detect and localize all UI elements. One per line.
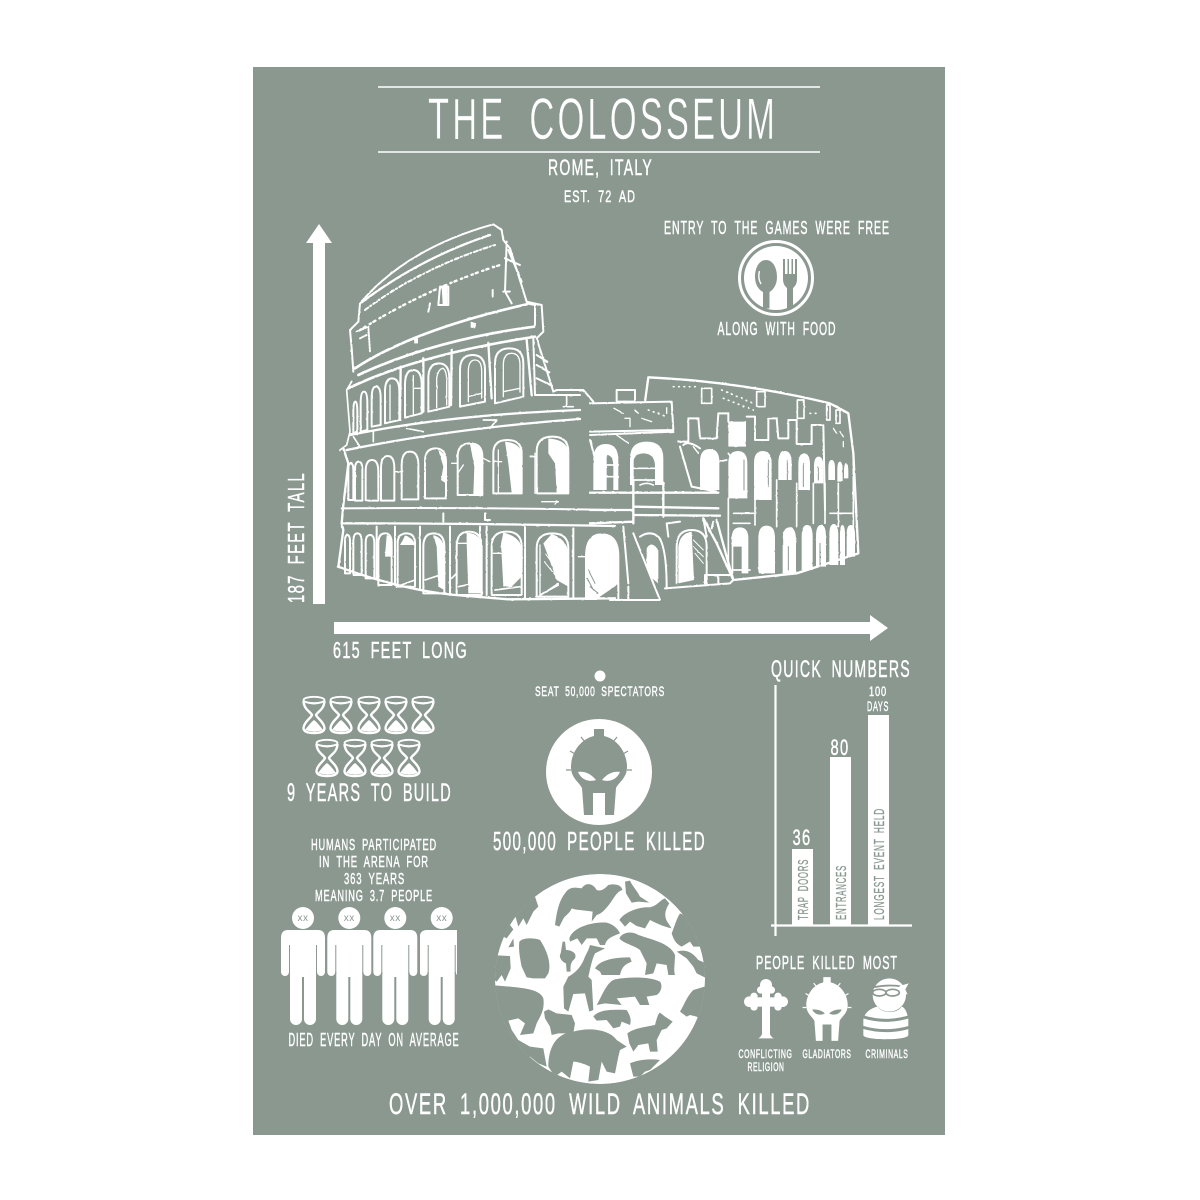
- bar: longest event held: LONGEST EVENT HELD: [871, 808, 888, 920]
- icon: 3.7 human figures: xx: [436, 913, 447, 924]
- text: 9 years to build: 9 YEARS TO BUILD: [287, 779, 452, 807]
- icon: 3.7 human figures: xx: [298, 913, 308, 924]
- text: entry to the games were free: ENTRY TO THE GAMES WERE FREE: [664, 218, 890, 238]
- title block: EST. 72 AD: [564, 187, 636, 206]
- text: seat 50,000 spectators: SEAT 50,000 SPECTATORS: [535, 683, 665, 699]
- sub-element: lower left arcades: [338, 437, 615, 599]
- icon: cross: [744, 979, 788, 1038]
- text: died every day: DIED EVERY DAY ON AVERAGE: [288, 1030, 460, 1050]
- text: humans participated: MEANING 3.7 PEOPLE: [315, 888, 433, 905]
- title block: ROME, ITALY: [548, 155, 653, 180]
- bar: entrances: [830, 735, 851, 925]
- text: 500,000 people killed: 500,000 PEOPLE KILLED: [493, 826, 706, 856]
- infographic poster: [253, 67, 945, 1135]
- icon: spectator dot: [594, 670, 606, 682]
- text: conflicting religion: RELIGION: [748, 1060, 784, 1074]
- bar: longest event held: [867, 683, 889, 925]
- text: gladiators: GLADIATORS: [802, 1047, 852, 1061]
- icon: 3.7 human figures: xx: [390, 913, 401, 924]
- text: conflicting religion: CONFLICTING: [738, 1047, 792, 1061]
- icon: criminal: [863, 978, 909, 1039]
- title block: THE COLOSSEUM: [428, 87, 778, 152]
- icon: hourglasses for nine years: [304, 697, 434, 776]
- arrow: height 187 feet: 187 FEET TALL: [283, 472, 309, 603]
- text: humans participated: 363 YEARS: [344, 871, 405, 888]
- bar: trap doors: 36: [792, 825, 812, 850]
- title block: [378, 87, 820, 206]
- bar: entrances: 80: [830, 735, 850, 760]
- icon: gladiator helmet in circle: [546, 719, 652, 825]
- panel: poster background: [253, 67, 945, 1135]
- text: criminals: CRIMINALS: [866, 1047, 908, 1061]
- sub-element: upper tiers: [340, 224, 593, 450]
- illustration: colosseum: [338, 224, 858, 600]
- bar: longest event held: 100: [869, 683, 887, 699]
- sub-element: ruined right wing: [585, 377, 858, 600]
- bar chart: quick numbers: [771, 683, 912, 936]
- bar: entrances: ENTRANCES: [833, 865, 850, 920]
- icon: spoon and fork plate: [740, 242, 812, 314]
- text: humans participated: IN THE ARENA FOR: [319, 854, 429, 871]
- icon: gladiator helmet: [803, 977, 851, 1041]
- bar: trap doors: [792, 825, 813, 925]
- arrow: height 187 feet: [283, 224, 332, 604]
- text: humans participated: HUMANS PARTICIPATED: [311, 837, 437, 854]
- heading: people killed most: PEOPLE KILLED MOST: [756, 953, 898, 973]
- heading: quick numbers: QUICK NUMBERS: [771, 656, 911, 683]
- icon: 3.7 human figures: [281, 907, 464, 1025]
- arrow: length 615 feet: [333, 615, 888, 663]
- text: humans participated: [311, 837, 437, 905]
- text: along with food: ALONG WITH FOOD: [718, 319, 836, 339]
- bar: longest event held: DAYS: [867, 698, 889, 714]
- icon: wild animals circle: [490, 870, 710, 1084]
- icon: 3.7 human figures: xx: [344, 913, 355, 924]
- text: conflicting religion: [738, 1047, 792, 1074]
- arrow: length 615 feet: 615 FEET LONG: [333, 637, 468, 663]
- bar: trap doors: TRAP DOORS: [795, 859, 812, 920]
- text: over 1,000,000 wild animals killed: OVER 1,000,000 WILD ANIMALS KILLED: [389, 1088, 811, 1121]
